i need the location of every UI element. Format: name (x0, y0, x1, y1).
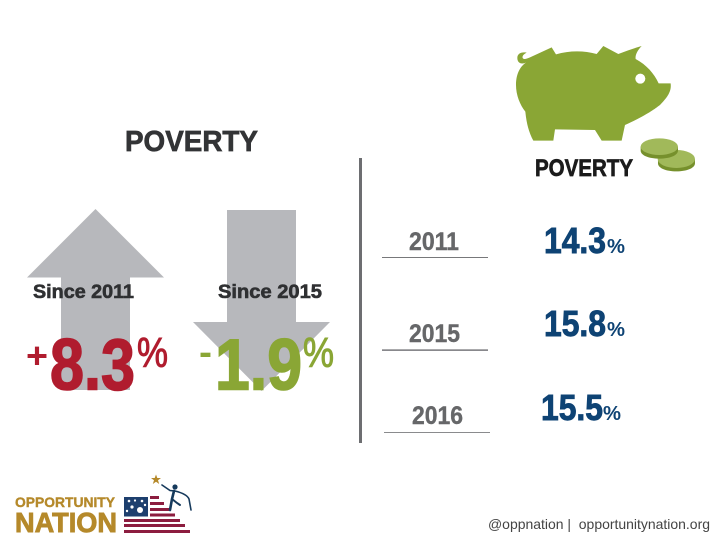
stat: plus 8.3 percent: % (137, 329, 168, 376)
row: 2016: % (603, 403, 621, 425)
up arrow (27, 209, 164, 390)
label: since 2011: Since 2011 (33, 282, 134, 303)
logo flag (124, 496, 190, 533)
label: since 2015: Since 2015 (218, 282, 322, 303)
stat: minus 1.9 percent: 1.9 (215, 326, 302, 406)
down arrow (193, 210, 330, 391)
row: 2011: 2011 (409, 228, 459, 256)
logo wordmark (15, 494, 117, 538)
heading: poverty: POVERTY (125, 126, 258, 158)
vertical divider (359, 158, 362, 443)
logo wordmark: NATION (15, 507, 117, 538)
logo star (151, 474, 161, 484)
logo figure (162, 484, 191, 510)
row: 2015: 2015 (409, 320, 460, 348)
stat: plus 8.3 percent: + (26, 335, 48, 376)
row: 2011 (382, 220, 625, 261)
row: 2016: 15.5 (541, 387, 603, 428)
icon: coins (641, 138, 695, 171)
row: 2011: % (607, 236, 625, 258)
row: 2015: 15.8 (544, 303, 606, 344)
stat: plus 8.3 percent: 8.3 (50, 326, 135, 406)
stat: minus 1.9 percent: - (199, 331, 212, 372)
heading: poverty icon label: POVERTY (535, 155, 633, 182)
stat: minus 1.9 percent: % (303, 329, 334, 376)
row: 2015 (382, 303, 625, 351)
row: 2011: 14.3 (544, 220, 606, 261)
icon: piggy bank (516, 46, 671, 141)
row: 2016: 2016 (412, 402, 463, 430)
row: 2016 (384, 387, 621, 433)
row: 2015: % (607, 319, 625, 341)
logo wordmark: OPPORTUNITY (15, 494, 116, 510)
footer text: @oppnation | opportunitynation.org (488, 516, 710, 532)
logo: opportunity nation (15, 474, 191, 538)
